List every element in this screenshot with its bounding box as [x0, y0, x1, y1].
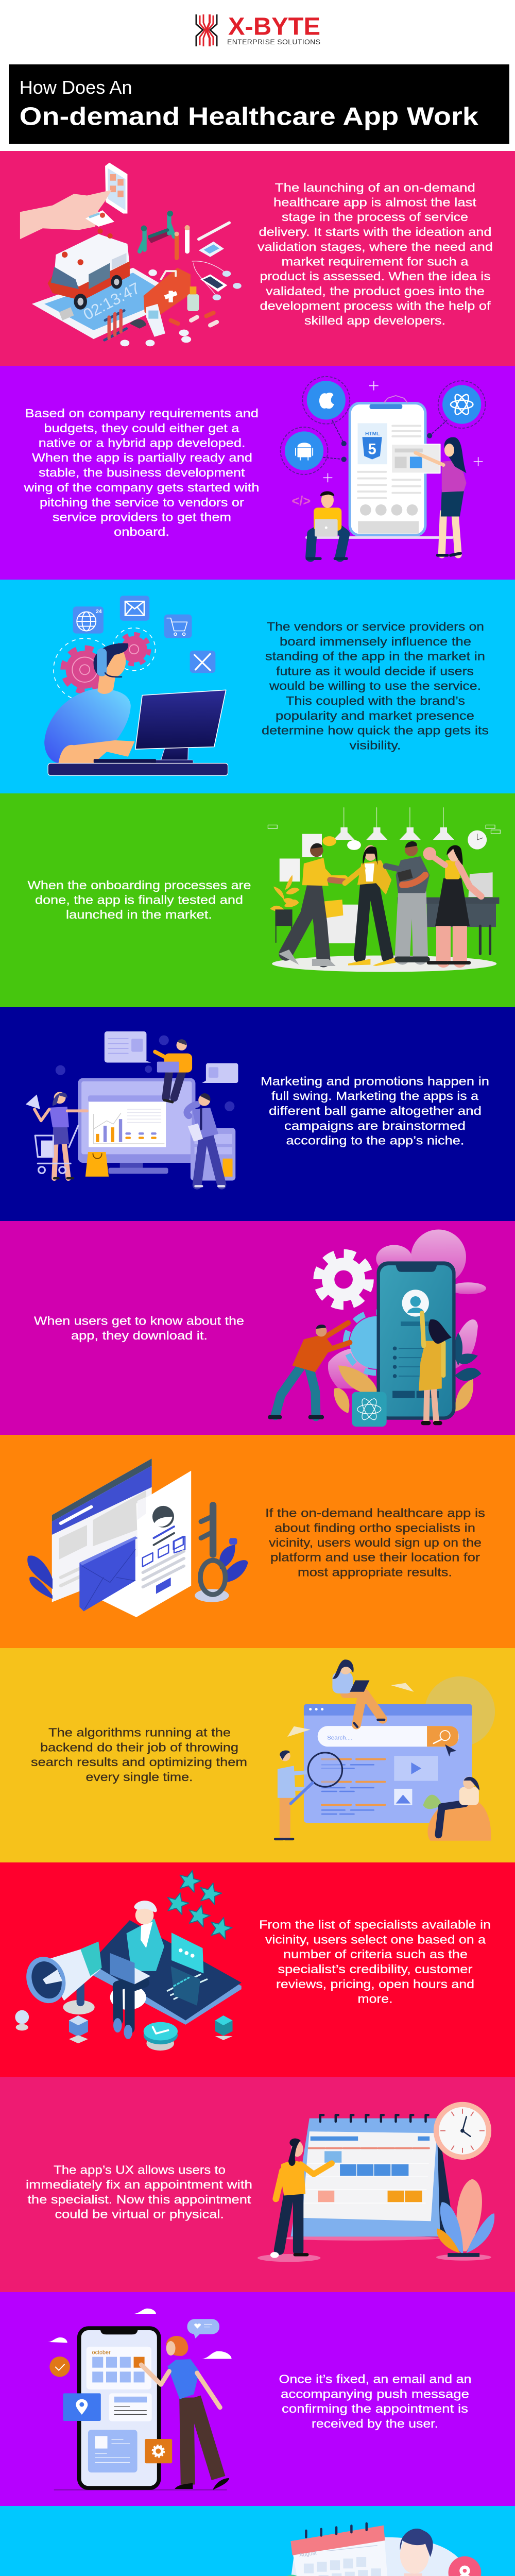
phone [377, 1261, 456, 1420]
man pushing [270, 1323, 350, 1417]
desk [48, 759, 228, 775]
browser window: Search.... [327, 1735, 352, 1741]
text block: done, the app is finally tested and [35, 893, 243, 907]
pendant lamps [333, 808, 454, 840]
text block: confirming the appointment is [282, 2402, 468, 2415]
logo tagline: ENTERPRISE SOLUTIONS [227, 38, 320, 46]
text block: market requirement for such a [281, 255, 469, 268]
ground line [54, 2489, 227, 2490]
text block [26, 2163, 252, 2221]
panel: step 11 confirmation [0, 2292, 515, 2506]
text block: every single time. [85, 1770, 193, 1784]
calendar [290, 2115, 455, 2236]
pills [120, 313, 217, 346]
text block: The app’s UX allows users to [54, 2163, 226, 2176]
phone: october [92, 2350, 111, 2356]
white gear [318, 1254, 369, 1305]
text block: immediately fix an appointment with [26, 2178, 252, 2191]
clock [434, 2102, 491, 2160]
text block: This coupled with the brand’s [286, 694, 465, 707]
text block: service providers to get them [53, 511, 231, 524]
monitor tile [130, 304, 165, 337]
illustration: woman booking date on phone [47, 2309, 232, 2490]
illustration: support agent at computer [44, 596, 228, 775]
illustration: app development with platform icons [281, 377, 486, 558]
wall items [268, 825, 500, 882]
text block: Based on company requirements and [25, 406, 259, 420]
envelope [79, 1536, 138, 1612]
text block: board immensely influence the [280, 635, 471, 648]
panel: step 2 native or hybrid [0, 366, 515, 580]
text block: budgets, they could either get a [44, 421, 240, 435]
text block: different ball game altogether and [269, 1104, 482, 1117]
text block [259, 1918, 491, 2006]
shadows [258, 2236, 491, 2262]
cubes and ball [15, 2010, 233, 2043]
agent [44, 643, 134, 764]
text block [265, 1506, 485, 1579]
panel: step 6 download [0, 1221, 515, 1435]
medical case [144, 268, 191, 319]
floating icon tiles [73, 596, 215, 673]
chat tile [171, 1933, 203, 1973]
floor [272, 956, 496, 972]
potted plant [270, 875, 300, 942]
text block: validated, the product goes into the [266, 284, 485, 298]
woman [270, 2139, 332, 2258]
bottle [187, 286, 199, 311]
text block: stage in the process of service [282, 210, 468, 224]
panel: step 4 testing and launch [0, 793, 515, 1007]
leaves [334, 1333, 481, 1413]
text block: visibility. [349, 738, 401, 752]
text block: specialist’s credibility, customer [278, 1962, 473, 1976]
text block: If the on-demand healthcare app is [265, 1506, 485, 1520]
text block [28, 878, 251, 921]
text block: The vendors or service providers on [267, 620, 484, 633]
gears [54, 628, 156, 701]
woman reaching [419, 1313, 452, 1423]
thermometer [199, 223, 229, 239]
check badge [282, 2574, 302, 2576]
text block: app, they download it. [71, 1329, 208, 1342]
browser window [304, 1704, 472, 1823]
profile card [79, 1471, 191, 1617]
man with clipboard [187, 1093, 224, 1186]
shopping cart [35, 1126, 78, 1173]
text block: received by the user. [312, 2417, 438, 2430]
platform icon circles [281, 377, 486, 474]
text block [258, 181, 493, 327]
plus signs [323, 381, 483, 482]
chart panel [88, 1095, 166, 1147]
illustration: calendar, clock and woman [258, 2102, 494, 2262]
browser window [52, 1459, 152, 1602]
text block: launched in the market. [66, 908, 212, 921]
man with magnifying glass [275, 1751, 342, 1839]
illustration: specialist updating calendar [282, 2523, 481, 2576]
speech bubbles [105, 1031, 238, 1083]
text block: campaigns are brainstormed [284, 1119, 466, 1132]
calendar [290, 2523, 391, 2576]
woman with laptop [332, 1659, 384, 1727]
text block: skilled app developers. [304, 314, 445, 327]
background blob [287, 2537, 472, 2576]
check badge [49, 2357, 70, 2377]
pin badge [449, 2556, 481, 2576]
woman [141, 2336, 229, 2489]
calendar: August [299, 2550, 317, 2558]
logo wordmark: X-BYTE [228, 13, 320, 40]
text block: full swing. Marketing the apps is a [271, 1089, 479, 1103]
stars [164, 1868, 234, 1940]
hand and phone [20, 163, 127, 239]
text block: more. [357, 1992, 392, 2006]
woman presenting [416, 437, 467, 555]
text block: validation stages, where the need and [258, 240, 493, 253]
megaphone [20, 1942, 102, 2009]
panel: step 7 sign up [0, 1435, 515, 1648]
text block: the specialist. Now this appointment [28, 2193, 251, 2206]
text block: native or a hybrid app developed. [39, 436, 246, 450]
text block: When the onboarding processes are [28, 878, 251, 892]
isometric phone [88, 1920, 242, 2025]
text block: reviews, pricing, open hours and [276, 1977, 474, 1991]
man with laptop [307, 491, 347, 558]
text block: When the app is partially ready and [32, 451, 252, 464]
woman on bean bag [423, 1776, 491, 1841]
text block: development process with the help of [260, 299, 491, 312]
text block: Once it’s fixed, an email and an [279, 2372, 472, 2386]
stretcher team [140, 211, 190, 258]
text block: standing of the app in the market in [265, 650, 485, 663]
woman waving [423, 845, 481, 963]
text block [262, 620, 489, 752]
test tubes [105, 311, 127, 340]
text block: future as it would decide if users [276, 664, 474, 677]
stand base [63, 1976, 95, 2014]
text block: onboard. [114, 525, 169, 538]
text block: determine how quick the app gets its [262, 724, 489, 737]
man with laptop [155, 1039, 192, 1102]
man with laptop [110, 1901, 164, 2039]
text block [31, 1726, 247, 1784]
connector lines [323, 420, 447, 460]
text block: search results and optimizing them [31, 1755, 247, 1769]
text block: When users get to know about the [34, 1314, 244, 1327]
location marker pole [195, 1502, 237, 1602]
text block: pitching the service to vendors or [40, 496, 244, 509]
text block: vicinity, users select one based on a [265, 1933, 486, 1946]
panel: step 3 vendors [0, 580, 515, 793]
globe [425, 1676, 495, 1747]
illustration: ambulance and medical kit on phone [20, 163, 242, 346]
panel: step 5 marketing [0, 1007, 515, 1221]
text block: accompanying push message [281, 2387, 469, 2400]
paper planes [287, 1683, 414, 1737]
woman with megaphone [26, 1092, 87, 1178]
text block: delivery. It starts with the ideation and [259, 225, 491, 239]
chat bubble [187, 2319, 219, 2338]
monitor [135, 690, 226, 764]
illustration: marketing dashboard [26, 1031, 238, 1186]
code tag: </> [291, 494, 311, 509]
text block: Marketing and promotions happen in [261, 1075, 489, 1088]
logo mark [196, 14, 217, 46]
plant [437, 2179, 494, 2257]
phone: 5 [368, 440, 376, 457]
blue gear [346, 1312, 406, 1373]
text block: The algorithms running at the [48, 1726, 231, 1739]
stethoscope and monitor [148, 261, 242, 300]
text block [34, 1314, 244, 1342]
panel: step 1 launch [0, 151, 515, 366]
calculator block [191, 1128, 235, 1180]
text block [279, 2372, 472, 2430]
gear tile [145, 2439, 172, 2463]
monitor [78, 1078, 195, 1174]
panel: step 9 choosing a specialist [0, 1862, 515, 2077]
text block: healthcare app is almost the last [273, 196, 477, 209]
panel: step 10 appointment [0, 2077, 515, 2292]
phone: HTML [365, 431, 380, 437]
panel: step 12 specialist calendar [0, 2506, 515, 2576]
text block: most appropriate results. [298, 1565, 452, 1579]
text block: number of criteria such as the [283, 1947, 468, 1961]
leaves [27, 1545, 248, 1599]
shopping bag [85, 1152, 109, 1177]
table [305, 536, 453, 539]
specialist [335, 2529, 456, 2576]
text block: wing of the company gets started with [23, 481, 259, 494]
background clouds [328, 1229, 486, 1388]
location tile [63, 2393, 101, 2421]
text block: platform and use their location for [270, 1551, 480, 1564]
man with clipboard [386, 841, 430, 959]
logo [196, 13, 320, 46]
text block: would be willing to use the service. [269, 679, 481, 692]
title banner [9, 64, 509, 144]
text block: about finding ortho specialists in [274, 1521, 475, 1534]
phone platform [32, 268, 184, 339]
text block: popularity and market presence [276, 709, 474, 722]
phone [79, 2328, 159, 2488]
illustration: search results window [275, 1659, 495, 1841]
text block: vicinity, users would sign up on the [269, 1536, 482, 1549]
text block: could be virtual or physical. [55, 2208, 224, 2221]
man shaking hands [279, 843, 345, 966]
blood pressure device [199, 242, 224, 257]
clouds [47, 2309, 232, 2359]
phone platform: 02:13:47 [80, 279, 143, 324]
phone [350, 396, 440, 535]
woman with jacket [345, 845, 396, 966]
button [144, 2022, 178, 2050]
small like icons [56, 1036, 234, 1111]
text block: according to the app’s niche. [286, 1134, 465, 1147]
panel: step 8 algorithms [0, 1648, 515, 1862]
text block: From the list of specialists available in [259, 1918, 491, 1931]
illustration: team handshake in office [268, 808, 500, 972]
illustration: users and phone with gear [270, 1229, 486, 1427]
text block: The launching of an on-demand [275, 181, 475, 194]
bag [324, 900, 343, 918]
text block [261, 1075, 489, 1147]
text block: backend do their job of throwing [40, 1740, 238, 1754]
text block [23, 406, 259, 538]
teal tile [352, 1392, 387, 1427]
illustration: sign-up pages and location pin [27, 1459, 248, 1617]
office furniture [325, 872, 499, 954]
illustration: phone, megaphone and rating stars [15, 1868, 242, 2050]
text block: stable, the business development [39, 466, 245, 479]
title line 2: On-demand Healthcare App Work [20, 103, 479, 130]
ambulance [47, 228, 130, 310]
floating icon tiles: 24 [96, 609, 102, 615]
title line 1: How Does An [20, 77, 132, 98]
text block: product is assessed. When the idea is [260, 269, 490, 283]
